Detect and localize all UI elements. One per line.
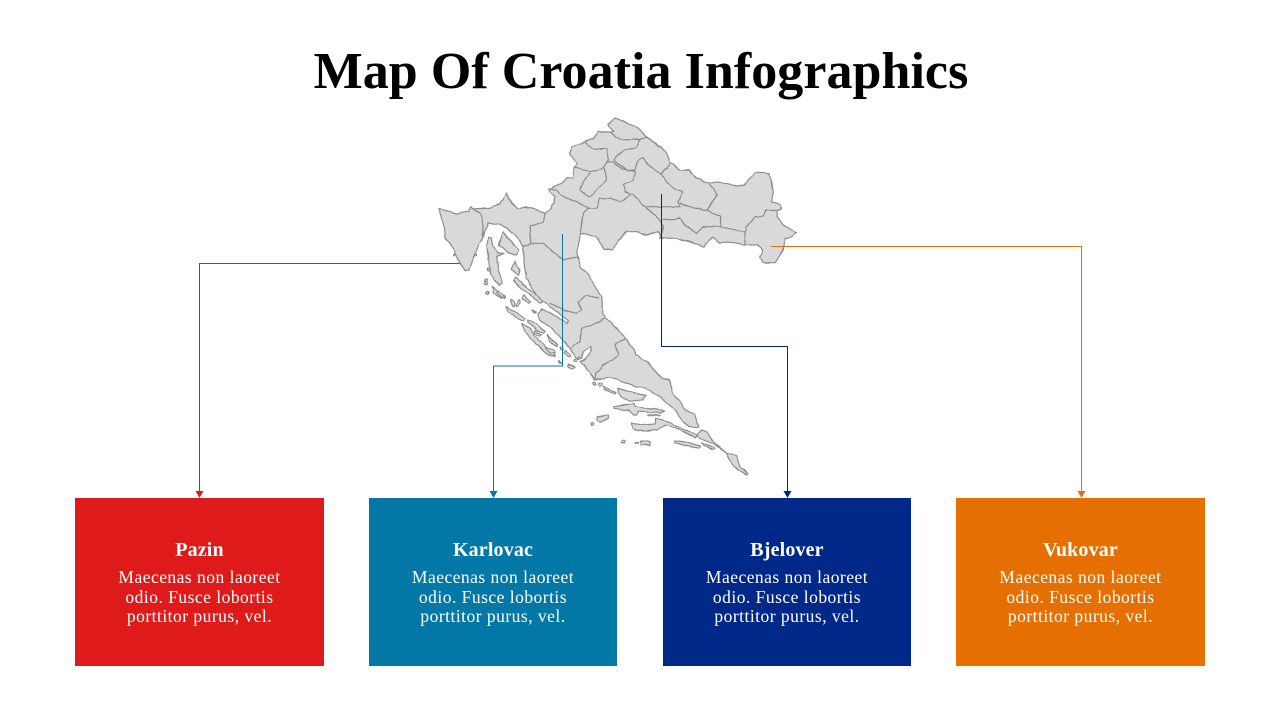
- panel: Karlovac: Karlovac: [453, 539, 533, 561]
- panel: Pazin: odio. Fusce lobortis: [125, 587, 274, 607]
- title: Map Of Croatia Infographics: [314, 43, 968, 100]
- Istria region: [439, 207, 483, 271]
- northern islands: [453, 232, 543, 303]
- connector: Karlovac: [490, 234, 562, 498]
- panel: Vukovar: Vukovar: [1043, 539, 1118, 561]
- connector: Pazin: [196, 264, 460, 498]
- panel: Bjelover: porttitor purus, vel.: [714, 606, 860, 626]
- panel: Karlovac: porttitor purus, vel.: [420, 606, 566, 626]
- panel: Karlovac: odio. Fusce lobortis: [419, 587, 567, 607]
- panel: Vukovar: [956, 498, 1205, 666]
- panel: Vukovar: Maecenas non laoreet: [999, 567, 1162, 587]
- panel: Vukovar: porttitor purus, vel.: [1008, 606, 1153, 626]
- panel: Bjelover: [663, 498, 911, 666]
- panel: Pazin: [75, 498, 324, 666]
- panel: Karlovac: [369, 498, 617, 666]
- Dalmatian islands: [486, 291, 747, 475]
- panel: Pazin: porttitor purus, vel.: [127, 606, 272, 626]
- panel: Bjelover: Maecenas non laoreet: [706, 567, 868, 587]
- panel: Karlovac: Maecenas non laoreet: [412, 567, 574, 587]
- county borders: [523, 133, 777, 380]
- connector: Bjelover: [662, 194, 792, 498]
- panel: Pazin: Pazin: [175, 539, 224, 561]
- panel: Pazin: Maecenas non laoreet: [118, 567, 281, 587]
- mainland: [473, 117, 797, 427]
- panel: Bjelover: Bjelover: [750, 539, 824, 561]
- panel: Bjelover: odio. Fusce lobortis: [713, 587, 861, 607]
- panel: Vukovar: odio. Fusce lobortis: [1006, 587, 1155, 607]
- connector: Vukovar: [771, 246, 1086, 498]
